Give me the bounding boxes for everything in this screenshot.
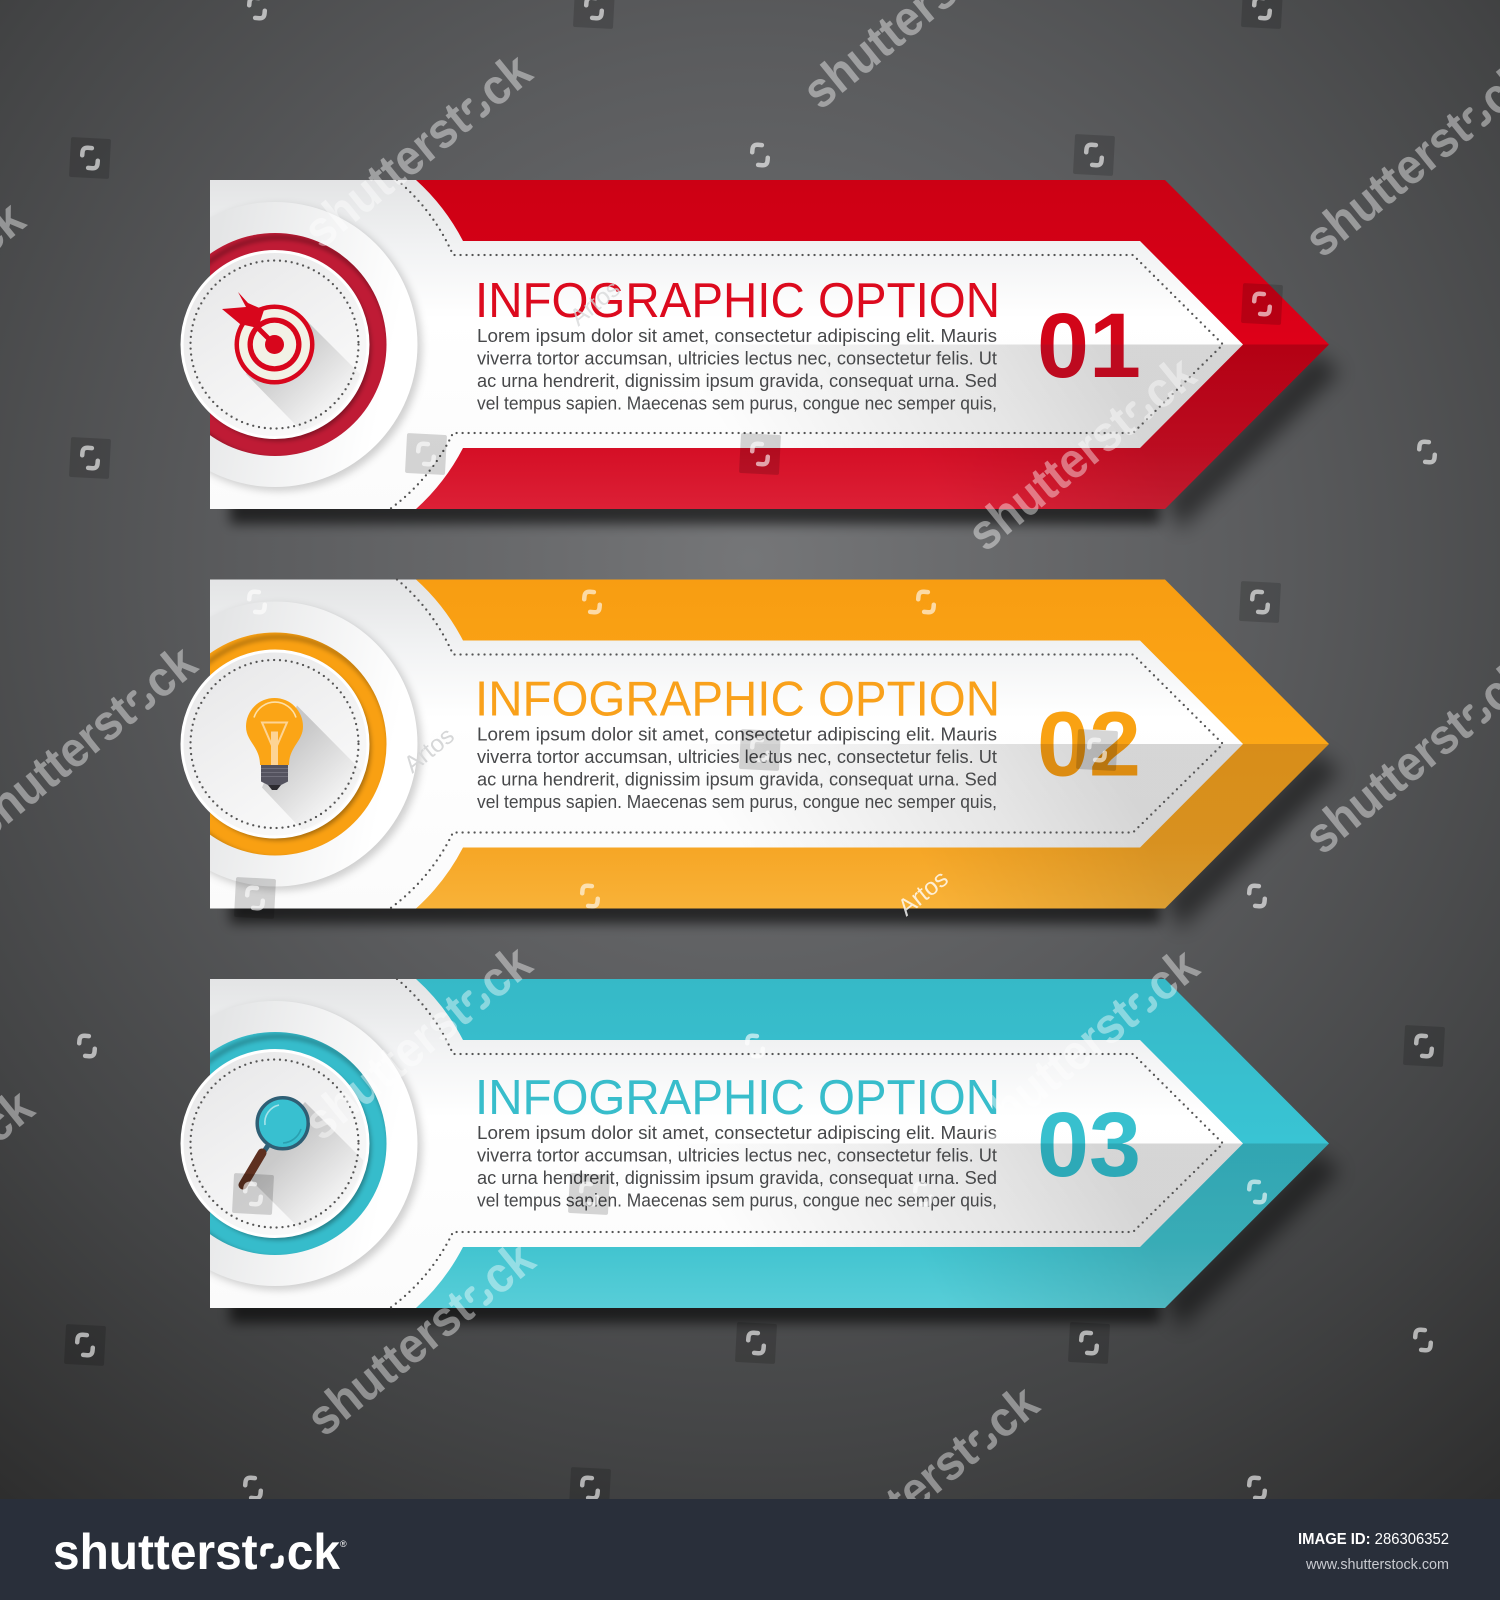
inner disc bbox=[182, 651, 368, 837]
colour ring bbox=[210, 632, 386, 856]
icon long shadow bbox=[246, 320, 358, 430]
dotted outline bbox=[390, 979, 1223, 1308]
card shadow bbox=[230, 352, 1340, 530]
footer image id: IMAGE ID: 286306352 bbox=[1298, 1531, 1449, 1548]
outer disc bbox=[210, 202, 426, 494]
body text: Lorem ipsum dolor sit amet, consectetur adipiscing elit. Mauris bbox=[477, 724, 997, 744]
small artist credits: Artos bbox=[893, 865, 954, 922]
body text: ac urna hendrerit, dignissim ipsum gravida, consequat urna. Sed bbox=[477, 768, 997, 790]
body text bbox=[477, 325, 997, 414]
small artist credits: Artos bbox=[399, 722, 460, 779]
body text: viverra tortor accumsan, ultricies lectus nec, consectetur felis. Ut bbox=[477, 348, 997, 368]
body text: Lorem ipsum dolor sit amet, consectetur adipiscing elit. Mauris bbox=[477, 325, 997, 346]
watermark text: shutterstock bbox=[957, 345, 1206, 562]
footer registered mark: ® bbox=[340, 1539, 347, 1549]
icon long shadow bbox=[251, 1102, 363, 1229]
watermark text: shutterstock bbox=[960, 937, 1209, 1154]
white content panel bbox=[210, 979, 1243, 1308]
footer url: www.shutterstock.com bbox=[1305, 1556, 1449, 1573]
panel: option 03 bbox=[132, 979, 1340, 1329]
colour ring bbox=[210, 1032, 386, 1255]
body text bbox=[477, 724, 997, 812]
watermark text: shutterstock bbox=[800, 1374, 1049, 1591]
body text: vel tempus sapien. Maecenas sem purus, congue nec semper quis, bbox=[477, 791, 997, 812]
number: 02 bbox=[1037, 694, 1141, 796]
dotted circle bbox=[190, 660, 358, 828]
watermark text: shutterstock bbox=[293, 934, 542, 1151]
inner disc bbox=[182, 1050, 368, 1236]
icon long shadow bbox=[262, 706, 360, 828]
card shadow bbox=[230, 752, 1340, 930]
body text: Lorem ipsum dolor sit amet, consectetur adipiscing elit. Mauris bbox=[477, 1122, 997, 1143]
heading: INFOGRAPHIC OPTION bbox=[475, 274, 1000, 328]
panel: option 01 bbox=[132, 180, 1340, 530]
outer disc bbox=[210, 1001, 426, 1294]
body text: ac urna hendrerit, dignissim ipsum gravida, consequat urna. Sed bbox=[477, 370, 997, 391]
arrow band bottom bbox=[300, 344, 1329, 509]
colour ring bbox=[210, 233, 386, 456]
body text: viverra tortor accumsan, ultricies lectus nec, consectetur felis. Ut bbox=[477, 1144, 997, 1166]
body text: vel tempus sapien. Maecenas sem purus, congue nec semper quis, bbox=[477, 392, 997, 414]
inner disc bbox=[182, 252, 368, 438]
small artist credits bbox=[399, 275, 954, 922]
icon: target bbox=[222, 292, 314, 384]
heading: INFOGRAPHIC OPTION bbox=[475, 1071, 1000, 1125]
number: 01 bbox=[1037, 295, 1141, 397]
icon: magnifying glass bbox=[243, 1098, 308, 1185]
outer disc bbox=[210, 602, 426, 894]
arrow band top bbox=[300, 180, 1329, 344]
arrow band top bbox=[300, 580, 1329, 744]
arrow band bottom bbox=[300, 744, 1329, 908]
panel lower shade bbox=[772, 1144, 1243, 1247]
watermark text: shutterstock bbox=[293, 42, 542, 259]
body text: vel tempus sapien. Maecenas sem purus, congue nec semper quis, bbox=[477, 1190, 997, 1210]
number: 03 bbox=[1037, 1094, 1141, 1196]
panel lower shade bbox=[780, 744, 1243, 848]
footer logo: shutterstock bbox=[53, 1524, 340, 1580]
icon: light bulb bbox=[246, 698, 303, 790]
arrow band top bbox=[300, 979, 1329, 1144]
panel lower shade bbox=[772, 344, 1243, 448]
body text bbox=[477, 1122, 997, 1210]
watermark text: shutterstock bbox=[296, 1230, 545, 1447]
white content panel bbox=[210, 580, 1243, 908]
dotted outline bbox=[390, 580, 1223, 908]
dotted circle bbox=[190, 260, 358, 428]
card shadow bbox=[230, 1151, 1340, 1329]
body text: ac urna hendrerit, dignissim ipsum gravida, consequat urna. Sed bbox=[477, 1167, 997, 1188]
panel: option 02 bbox=[132, 580, 1340, 930]
white content panel bbox=[210, 180, 1243, 509]
small artist credits: Artos bbox=[565, 275, 626, 332]
dotted circle bbox=[190, 1060, 358, 1228]
footer bar bbox=[0, 1499, 1500, 1600]
heading: INFOGRAPHIC OPTION bbox=[475, 672, 1000, 726]
body text: viverra tortor accumsan, ultricies lectus nec, consectetur felis. Ut bbox=[477, 746, 997, 767]
arrow band bottom bbox=[300, 1144, 1329, 1308]
dotted outline bbox=[390, 180, 1223, 509]
